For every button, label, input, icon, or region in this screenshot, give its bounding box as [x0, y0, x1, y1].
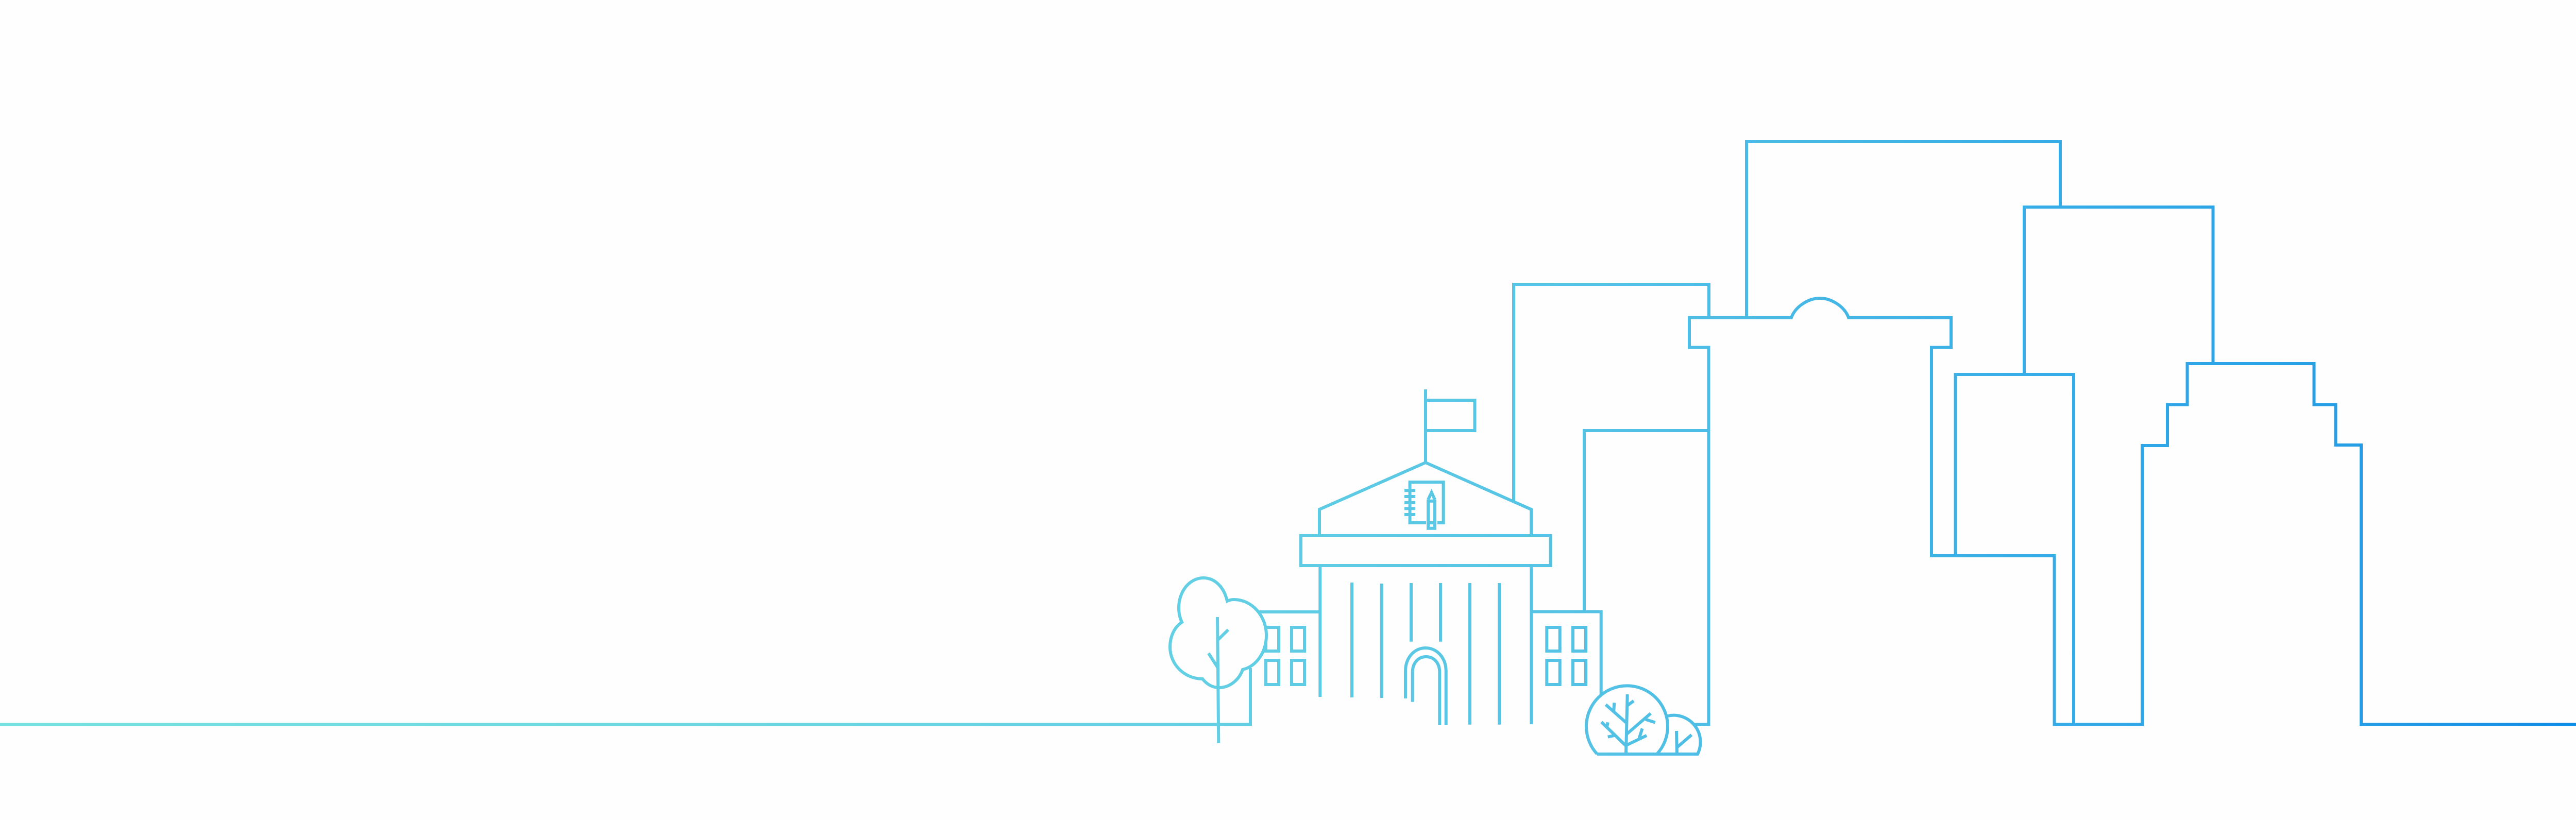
campus entablature	[1301, 536, 1551, 566]
campus columns	[1352, 583, 1499, 725]
tree crown	[1170, 578, 1266, 688]
flag on campus roof	[1426, 389, 1475, 463]
bushes	[1586, 686, 1701, 754]
low building behind campus wing	[1584, 431, 1708, 612]
left ground line and left wing wall	[0, 668, 1250, 724]
icon: notebook and pencil	[1404, 482, 1444, 528]
campus arched door	[1405, 648, 1446, 725]
tree trunk and branches	[1209, 617, 1228, 743]
building behind campus	[1514, 284, 1709, 502]
mid-rise building behind the domed tower	[1956, 374, 2074, 724]
small bush	[1657, 715, 1701, 754]
tree	[1170, 578, 1266, 743]
campus right wing	[1531, 612, 1601, 695]
campus left wing	[1259, 612, 1320, 685]
campus main walls	[1320, 566, 1531, 724]
tower right of tall tower	[2024, 207, 2213, 374]
large bush	[1586, 686, 1668, 754]
campus gabled roof	[1319, 463, 1531, 536]
small bush branches	[1676, 731, 1691, 754]
skyline outline: domed tower, stepped tower and right ground line	[1689, 298, 2576, 724]
tall tower behind the skyline	[1747, 142, 2060, 317]
large bush branches	[1601, 694, 1655, 754]
